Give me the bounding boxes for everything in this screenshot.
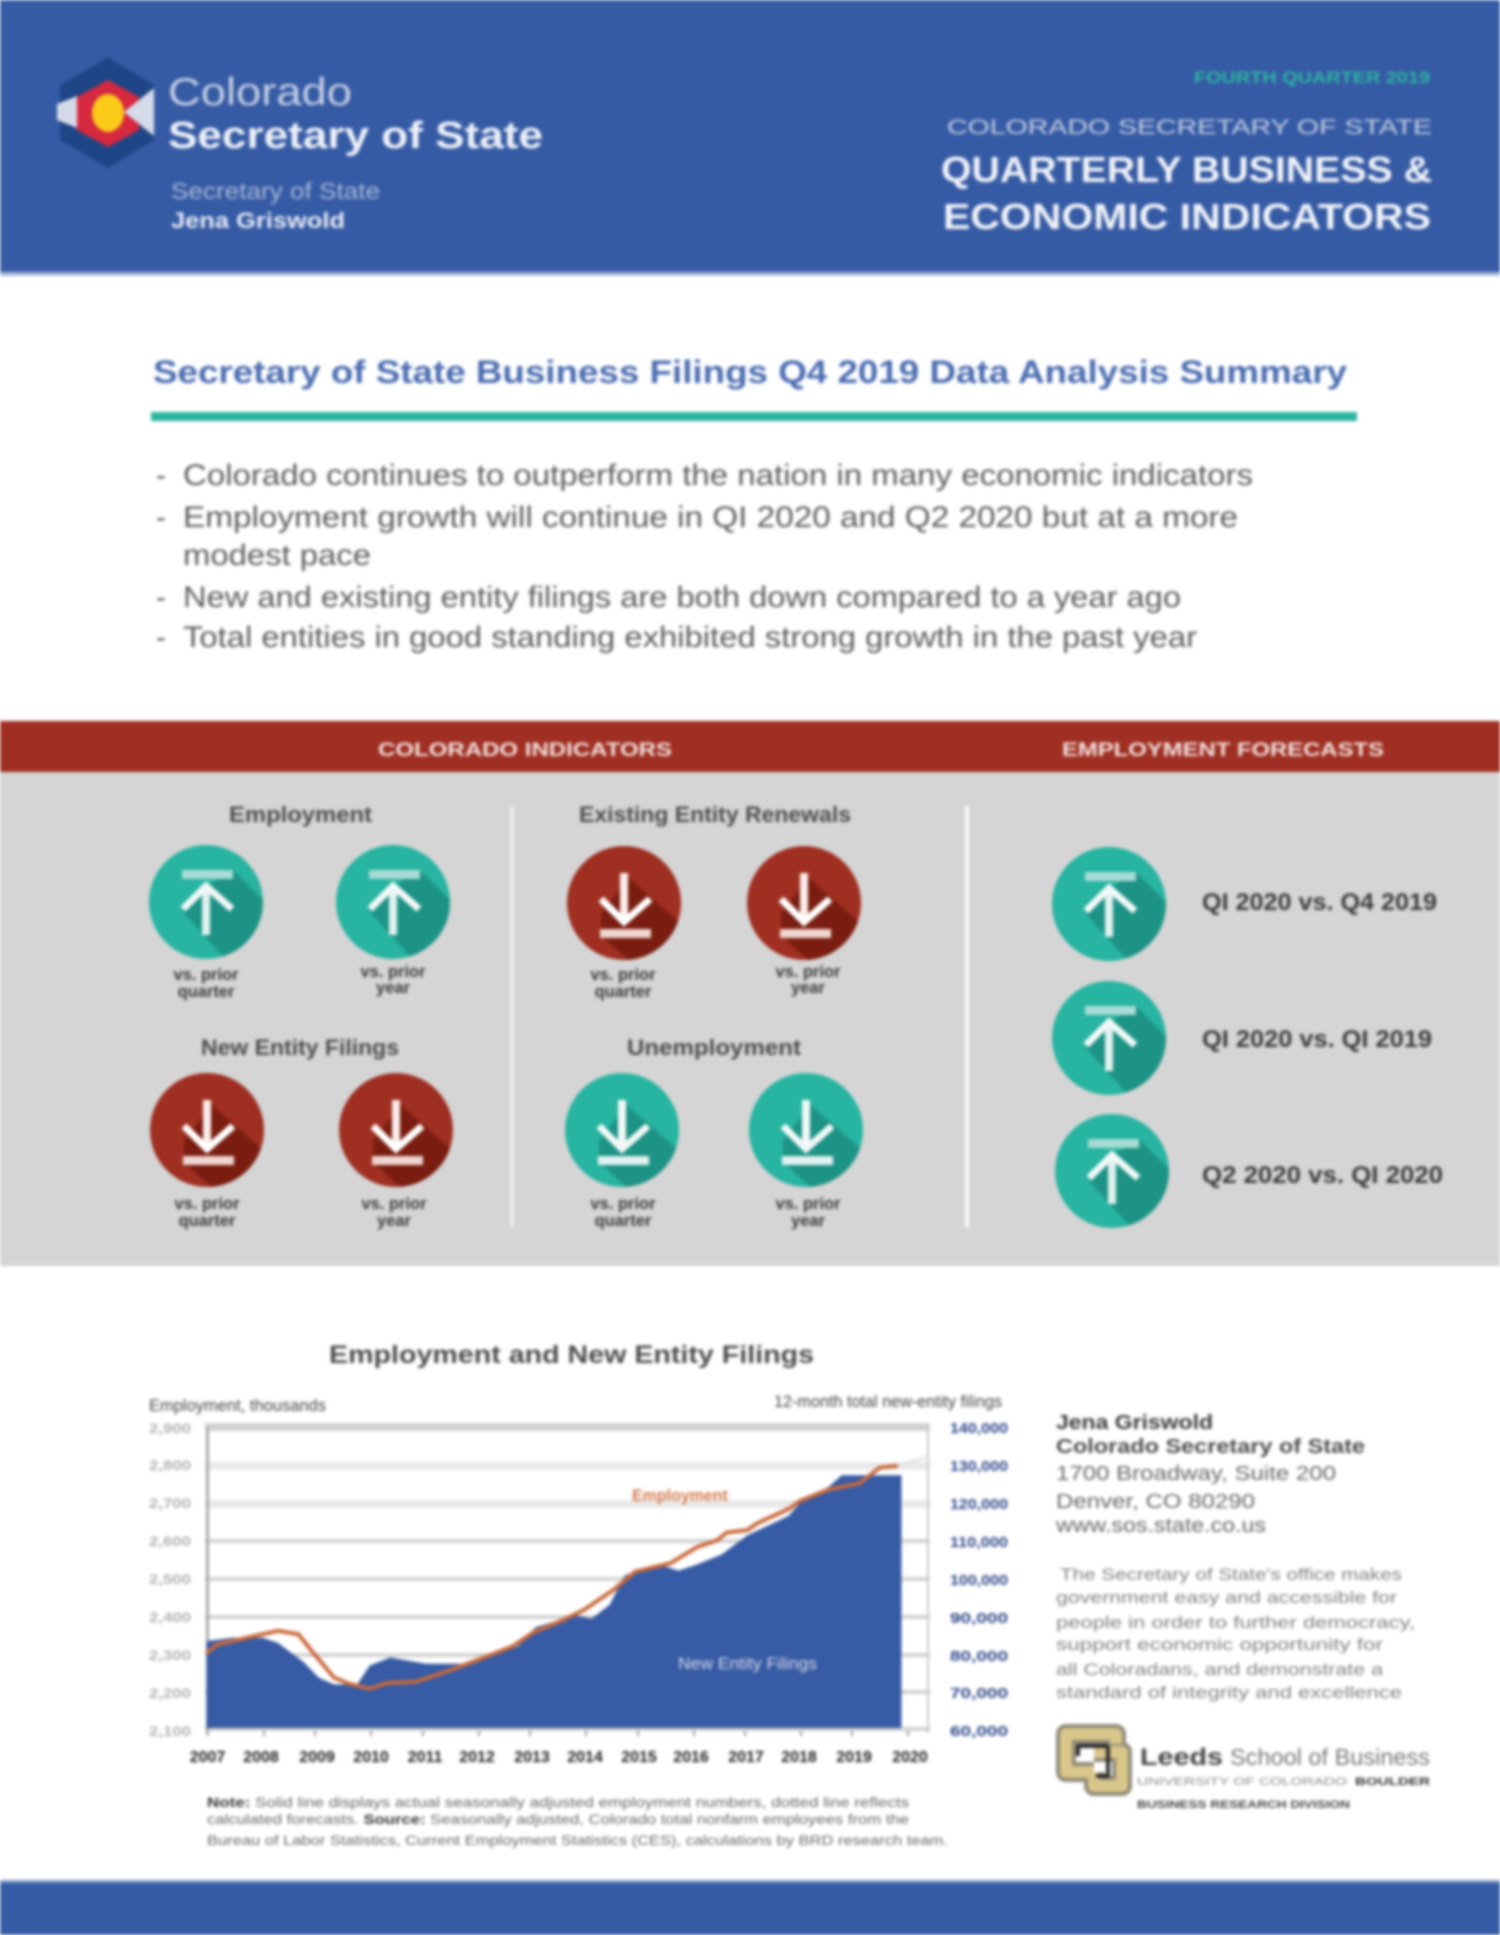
group: New Entity Filings: vs. prior <box>174 1195 240 1213</box>
group: Unemployment: Unemployment <box>627 1035 802 1060</box>
x axis years: 2014 <box>567 1749 603 1766</box>
right axis: 120,000 <box>950 1496 1008 1513</box>
mission statement: people in order to further democracy, <box>1056 1614 1415 1632</box>
group: Unemployment: quarter <box>595 1212 652 1230</box>
mission statement: government easy and accessible for <box>1056 1589 1398 1607</box>
axis titles: Employment, thousands <box>149 1396 326 1415</box>
icon: Colorado logo <box>57 57 154 168</box>
x ticks <box>208 1731 908 1736</box>
report title block: QUARTERLY BUSINESS & <box>941 149 1432 190</box>
logo wordmark <box>168 71 543 157</box>
series labels <box>632 1486 817 1673</box>
x axis years: 2015 <box>621 1749 657 1766</box>
x axis years: 2013 <box>514 1749 550 1766</box>
x axis years: 2010 <box>353 1749 389 1766</box>
axis titles: 12-month total new-entity filings <box>774 1392 1002 1411</box>
group: Existing Entity Renewals: vs. prior <box>775 963 841 981</box>
contact block: Jena Griswold <box>1056 1412 1213 1434</box>
group: New Entity Filings: year <box>377 1212 412 1230</box>
area: new entity filings <box>207 1475 901 1728</box>
left axis: 2,700 <box>149 1495 191 1511</box>
chart note: Note: Solid line displays actual seasonally adjusted employment numbers, dotted line reflects <box>207 1795 909 1810</box>
summary bullets: New and existing entity filings are both down compared to a year ago <box>183 581 1181 614</box>
left axis: 2,800 <box>149 1457 191 1473</box>
right axis: 60,000 <box>950 1723 1008 1740</box>
header band <box>0 0 1500 276</box>
group: Employment: vs. prior <box>173 966 239 984</box>
contact block: 1700 Broadway, Suite 200 <box>1056 1463 1336 1485</box>
Leeds wordmark: School of Business <box>1230 1744 1430 1770</box>
x axis years: 2012 <box>459 1749 495 1766</box>
mission statement: support economic opportunity for <box>1056 1636 1384 1654</box>
group: Existing Entity Renewals <box>567 802 894 1001</box>
footer band <box>0 1880 1500 1935</box>
right axis <box>927 1420 1008 1740</box>
right axis: 80,000 <box>950 1648 1008 1665</box>
chart title: Employment and New Entity Filings <box>329 1341 814 1369</box>
group: Unemployment: vs. prior <box>775 1195 841 1213</box>
forecast: Q2 vs Q1: Q2 2020 vs. QI 2020 <box>1202 1162 1443 1189</box>
heading: Colorado indicators: COLORADO INDICATORS <box>378 740 672 761</box>
forecast: Q2 vs Q1 <box>1055 1114 1443 1261</box>
x axis years: 2007 <box>190 1749 225 1766</box>
x axis years: 2018 <box>781 1749 817 1766</box>
group: Employment: Employment <box>229 802 373 827</box>
summary heading <box>151 354 1357 421</box>
summary bullets: Total entities in good standing exhibited strong growth in the past year <box>183 621 1197 654</box>
forecast: Q1 vs Q4 <box>1052 847 1437 994</box>
series labels: Employment <box>632 1486 728 1505</box>
mission statement: The Secretary of State's office makes <box>1060 1566 1402 1584</box>
x axis years: 2019 <box>836 1749 872 1766</box>
contact block <box>1055 1412 1365 1537</box>
group: Unemployment: year <box>791 1212 826 1230</box>
report title block: COLORADO SECRETARY OF STATE <box>947 116 1432 139</box>
logo wordmark: Secretary of State <box>168 115 543 157</box>
group: Unemployment <box>565 1035 896 1230</box>
forecast: Q1 vs Q4: QI 2020 vs. Q4 2019 <box>1202 889 1437 916</box>
group: Employment <box>149 802 483 1001</box>
contact block: Colorado Secretary of State <box>1056 1436 1365 1458</box>
summary bullets: modest pace <box>183 539 371 572</box>
x axis years: 2011 <box>408 1749 442 1766</box>
group: Employment: year <box>376 979 411 997</box>
group: Existing Entity Renewals: Existing Entity Renewals <box>579 802 851 827</box>
office holder: Jena Griswold <box>171 208 345 233</box>
grid lines <box>205 1423 930 1731</box>
Leeds wordmark: BUSINESS RESEARCH DIVISION <box>1137 1799 1350 1811</box>
line: employment forecast <box>898 1457 926 1466</box>
Leeds wordmark: UNIVERSITY OF COLORADO <box>1137 1776 1348 1788</box>
left axis: 2,200 <box>149 1685 191 1701</box>
office holder <box>171 178 380 233</box>
report title block <box>941 68 1432 237</box>
report title block: FOURTH QUARTER 2019 <box>1194 68 1430 87</box>
right axis: 70,000 <box>950 1685 1008 1702</box>
chart note: calculated forecasts. Source: Seasonally adjusted, Colorado total nonfarm employees from the <box>207 1812 909 1827</box>
summary bullets: - <box>156 621 166 654</box>
summary bullets: Colorado continues to outperform the nation in many economic indicators <box>183 459 1253 492</box>
x axis years: 2016 <box>673 1749 709 1766</box>
chart: employment and new entity filings <box>149 1392 1008 1766</box>
left axis: 2,900 <box>149 1420 191 1436</box>
left axis: 2,600 <box>149 1533 191 1549</box>
left axis <box>149 1420 209 1739</box>
mission statement <box>1056 1566 1415 1702</box>
axis titles <box>149 1392 1002 1415</box>
chart note: Bureau of Labor Statistics, Current Employment Statistics (CES), calculations by BRD research team. <box>207 1833 948 1848</box>
right axis: 90,000 <box>950 1610 1008 1627</box>
group: Existing Entity Renewals: year <box>791 979 826 997</box>
right axis: 100,000 <box>950 1572 1008 1589</box>
x axis years: 2008 <box>243 1749 279 1766</box>
left axis: 2,500 <box>149 1571 191 1587</box>
heading: employment forecasts: EMPLOYMENT FORECASTS <box>1062 740 1384 761</box>
left axis: 2,300 <box>149 1647 191 1663</box>
left axis: 2,100 <box>149 1723 191 1739</box>
group: New Entity Filings: New Entity Filings <box>201 1035 399 1060</box>
group: Employment: quarter <box>178 983 235 1001</box>
office holder: Secretary of State <box>171 178 380 204</box>
logo wordmark: Colorado <box>168 71 352 114</box>
mission statement: all Coloradans, and demonstrate a <box>1056 1661 1384 1679</box>
line: employment <box>207 1466 898 1689</box>
group: Unemployment: vs. prior <box>590 1195 656 1213</box>
summary bullets <box>156 459 1253 654</box>
series labels: New Entity Filings <box>678 1654 817 1673</box>
Leeds wordmark <box>1137 1744 1430 1811</box>
group: New Entity Filings: quarter <box>179 1212 236 1230</box>
summary bullets: - <box>156 459 166 492</box>
summary heading: Secretary of State Business Filings Q4 2019 Data Analysis Summary <box>153 354 1347 390</box>
forecast: Q1 vs Q1 <box>1052 981 1432 1128</box>
group: New Entity Filings: vs. prior <box>361 1195 427 1213</box>
summary bullets: Employment growth will continue in QI 2020 and Q2 2020 but at a more <box>183 501 1238 534</box>
report title block: ECONOMIC INDICATORS <box>943 196 1431 237</box>
right axis: 130,000 <box>950 1458 1008 1475</box>
mission statement: standard of integrity and excellence <box>1056 1684 1402 1702</box>
contact block: www.sos.state.co.us <box>1055 1515 1266 1537</box>
left axis: 2,400 <box>149 1609 191 1625</box>
chart note <box>207 1795 948 1848</box>
Leeds wordmark: Leeds <box>1140 1744 1223 1771</box>
right axis: 140,000 <box>950 1420 1008 1437</box>
contact block: Denver, CO 80290 <box>1056 1491 1255 1513</box>
right axis: 110,000 <box>950 1534 1008 1551</box>
summary bullets: - <box>156 501 166 534</box>
group: Employment: vs. prior <box>360 963 426 981</box>
x axis years: 2017 <box>728 1749 764 1766</box>
group: New Entity Filings <box>150 1035 486 1230</box>
Leeds wordmark: BOULDER <box>1355 1776 1430 1788</box>
x axis years: 2009 <box>299 1749 335 1766</box>
group: Existing Entity Renewals: quarter <box>595 983 652 1001</box>
group: Existing Entity Renewals: vs. prior <box>590 966 656 984</box>
icon: CU logo <box>1066 1734 1122 1786</box>
x axis years <box>190 1749 928 1766</box>
x axis years: 2020 <box>892 1749 928 1766</box>
panel: indicators <box>0 721 1500 1266</box>
summary bullets: - <box>156 581 166 614</box>
forecast: Q1 vs Q1: QI 2020 vs. QI 2019 <box>1202 1026 1432 1053</box>
